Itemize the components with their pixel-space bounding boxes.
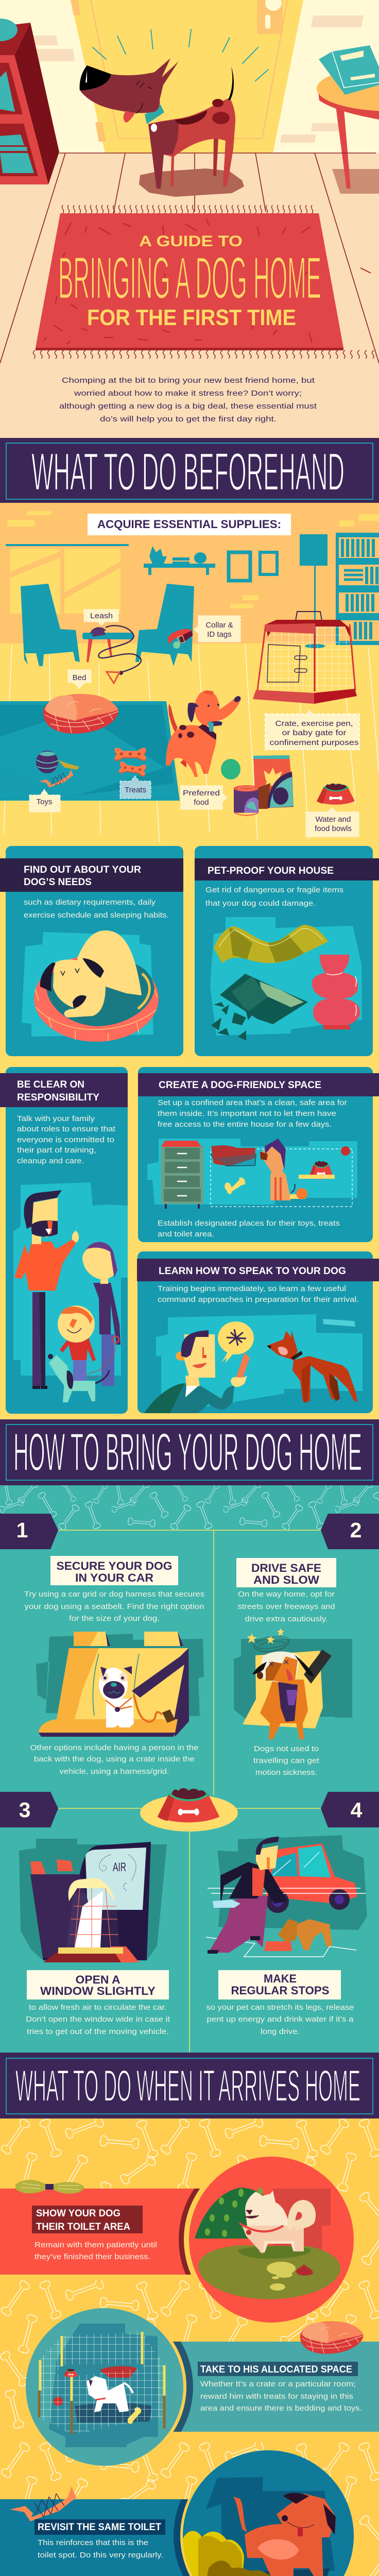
- dog shadow: [139, 168, 244, 197]
- heading: FIND OUT ABOUT YOUR: [24, 865, 141, 875]
- collar label: [194, 616, 240, 642]
- toys label: [29, 789, 60, 812]
- living room scenery: [6, 533, 379, 648]
- bookcase: [0, 19, 59, 184]
- intro text: worried about how to make it stress free? Don’t worry;: [74, 389, 302, 398]
- intro text: Chomping at the bit to bring your new best friend home, but: [62, 376, 315, 385]
- body text: such as dietary requirements, daily: [24, 898, 156, 907]
- badge 1: 1: [16, 1518, 28, 1542]
- panel: pet-proof your house: [195, 846, 379, 1056]
- illustration: open car window: [19, 1839, 167, 1962]
- title: A GUIDE TO: [139, 233, 243, 250]
- illustration: sleeping dog in bed: [22, 930, 159, 1042]
- title: FOR THE FIRST TIME: [87, 305, 296, 330]
- illustration: scarf, newspaper and vase: [210, 917, 362, 1041]
- step 2 text: [238, 1590, 335, 1623]
- body text: [158, 1098, 347, 1129]
- panel: show your dog their toilet area: [0, 2157, 354, 2323]
- preferred food label: [181, 786, 227, 809]
- step 3 text: [26, 2003, 170, 2036]
- badge 3: 3: [19, 1798, 30, 1822]
- illustration: dizzy dog: [234, 1628, 352, 1739]
- icon: green ball: [221, 759, 240, 779]
- heading: [17, 1079, 99, 1103]
- dog: [252, 1652, 314, 1739]
- badge 2: [321, 1514, 379, 1549]
- step 4 text: so your pet can stretch its legs, release: [206, 2003, 354, 2012]
- step 1 text lower: Other options include having a person in the: [30, 1743, 199, 1752]
- step 1 text: for the size of your dog.: [69, 1614, 160, 1623]
- drawers: [161, 1141, 203, 1209]
- heading: secure your dog: SECURE YOUR DOG: [57, 1560, 172, 1572]
- orange dog: [166, 690, 242, 777]
- step 2 text lower: Dogs not used to: [254, 1744, 319, 1753]
- speech bubble: [218, 1321, 254, 1363]
- step 3 text: tries to get out of the moving vehicle.: [27, 2027, 169, 2036]
- heading: open a window slightly: [27, 1970, 169, 1999]
- step 1 text lower: back with the dog, using a crate inside the: [34, 1755, 195, 1764]
- body text: everyone is committed to: [17, 1136, 114, 1144]
- intro text: do’s will help you to get the first day right.: [100, 415, 277, 423]
- icon: dog bed: [300, 2321, 364, 2354]
- heading: drive safe and slow: AND SLOW: [253, 1573, 319, 1586]
- illustration: pug in car seat: [36, 1632, 204, 1737]
- hero dog: [80, 58, 235, 189]
- body text: exercise schedule and sleeping habits.: [24, 911, 169, 920]
- heading: secure your dog: [50, 1556, 178, 1585]
- step 2 text: streets over freeways and: [238, 1602, 335, 1611]
- body text lower: Establish designated places for their toys, treats: [158, 1219, 340, 1228]
- crate label: confinement purposes: [270, 738, 358, 747]
- treats label: Treats: [125, 786, 146, 794]
- step 1 text lower: vehicle, using a harness/grid.: [60, 1767, 169, 1776]
- panel: find out about your dog's needs: [0, 846, 183, 1056]
- body text lower: [158, 1219, 340, 1239]
- door: [71, 0, 303, 153]
- step 2 text lower: travelling can get: [253, 1756, 320, 1765]
- heading: DOG’S NEEDS: [24, 877, 92, 888]
- dog: [260, 1139, 295, 1200]
- icon: central food bowl: [140, 1788, 238, 1832]
- body text: that your dog could damage.: [205, 899, 316, 908]
- man: [144, 1330, 234, 1413]
- panel: learn how to speak to your dog: [137, 1251, 379, 1413]
- white dog: [87, 2376, 133, 2412]
- body text: command approaches in preparation for their arrival.: [158, 1295, 359, 1304]
- icon: food bag and can: [234, 755, 294, 816]
- icon: toy: [10, 2486, 77, 2521]
- floor lines: [4, 644, 379, 842]
- body text: Get rid of dangerous or fragile items: [205, 886, 343, 894]
- heading: drive safe and slow: [236, 1558, 336, 1587]
- heading: secure your dog: IN YOUR CAR: [75, 1571, 153, 1584]
- badge 3: [0, 1792, 58, 1827]
- panel: acquire essential supplies: [0, 503, 379, 1419]
- icon: leash: [91, 625, 141, 683]
- heading: REVISIT THE SAME TOILET: [38, 2522, 161, 2533]
- leash label: Leash: [90, 612, 113, 620]
- illustration: man with treat and dog: [144, 1314, 363, 1413]
- panel: be clear on responsibility: [0, 1067, 128, 1414]
- body text: Remain with them patiently until: [35, 2241, 157, 2249]
- preferred food label: Preferred: [183, 789, 220, 798]
- heading: acquire essential supplies: ACQUIRE ESSENTIAL SUPPLIES:: [97, 518, 281, 531]
- intro text: [59, 376, 317, 423]
- heading: THEIR TOILET AREA: [36, 2222, 130, 2232]
- treats label: [120, 776, 151, 799]
- heading: acquire essential supplies: [88, 514, 291, 535]
- treat and hand: [231, 1352, 250, 1387]
- body text: cleanup and care.: [17, 1157, 84, 1165]
- toys label: Toys: [37, 798, 52, 806]
- step 1 text: your dog using a seatbelt. Find the right option: [25, 1602, 204, 1611]
- badge 1: [0, 1514, 58, 1549]
- heading: open a window slightly: WINDOW SLIGHTLY: [40, 1985, 156, 1997]
- body text: This reinforces that this is the: [38, 2538, 148, 2547]
- body text: Set up a confined area that’s a clean, safe area for: [158, 1098, 347, 1107]
- bed label: Bed: [73, 673, 86, 682]
- heading: [32, 2206, 143, 2233]
- illustration: orange dog and bushes: [182, 2477, 336, 2576]
- man: [14, 1190, 79, 1389]
- panel: create a dog-friendly space: [138, 1067, 379, 1242]
- water and food bowls label: food bowls: [315, 824, 352, 833]
- heading: LEARN HOW TO SPEAK TO YOUR DOG: [159, 1266, 346, 1277]
- motion lines: [93, 29, 268, 81]
- armchairs: [21, 584, 194, 666]
- crate label: or baby gate for: [282, 728, 346, 737]
- car: [266, 1843, 357, 1913]
- collar label: Collar &: [205, 621, 233, 630]
- illustration: dog on grass: [195, 2188, 340, 2299]
- body text: [158, 1284, 359, 1304]
- crate: [253, 612, 357, 704]
- body text: their part of training,: [17, 1146, 96, 1155]
- body text: [35, 2241, 157, 2261]
- rug: [33, 205, 374, 359]
- panel: arrival background: [0, 2119, 379, 2576]
- body text: reward him with treats for staying in this: [200, 2392, 353, 2401]
- body text: [205, 886, 343, 908]
- panel: revisit the same toilet: [0, 2444, 363, 2576]
- body text: [38, 2538, 163, 2560]
- body text: them inside. It’s important not to let them have: [158, 1109, 336, 1118]
- step 2 text: On the way home, opt for: [238, 1590, 335, 1599]
- panel: travel steps: [0, 1485, 379, 2053]
- step 2 text lower: motion sickness.: [255, 1768, 317, 1777]
- title: [58, 233, 321, 330]
- badge 4: 4: [351, 1798, 363, 1822]
- heading: CREATE A DOG-FRIENDLY SPACE: [159, 1080, 321, 1091]
- body text: [17, 1114, 116, 1165]
- teal rug: [0, 701, 180, 801]
- dog with bowl: [264, 1919, 332, 1951]
- body text lower: and toilet area.: [158, 1230, 214, 1239]
- red dog: [267, 1330, 357, 1402]
- boy: [58, 1306, 96, 1383]
- woman: [82, 1242, 120, 1386]
- heading: make regular stops: REGULAR STOPS: [231, 1984, 330, 1997]
- heading: TAKE TO HIS ALLOCATED SPACE: [200, 2364, 352, 2375]
- body text: Training begins immediately, so learn a few useful: [158, 1284, 346, 1293]
- heading: [35, 2519, 165, 2535]
- illustration: regular stop: [206, 1835, 367, 1957]
- body text: Talk with your family: [17, 1114, 95, 1123]
- crate label: Crate, exercise pen,: [275, 719, 353, 728]
- body text: toilet spot. Do this very regularly.: [38, 2551, 163, 2560]
- body text: area and ensure there is bedding and toys.: [200, 2404, 362, 2413]
- illustration: dog-friendly space: [147, 1139, 357, 1209]
- step 1 text: Try using a car grid or dog harness that secures: [24, 1590, 204, 1599]
- icon: bed: [43, 694, 118, 734]
- body text: free access to the entire house for a few days.: [158, 1120, 332, 1129]
- panel: hero room scene: [0, 0, 379, 438]
- step 1 text: [24, 1590, 204, 1623]
- icon: treats: [115, 748, 146, 777]
- icon: rope toy: [15, 2180, 84, 2194]
- heading: drive safe and slow: DRIVE SAFE: [251, 1562, 321, 1574]
- badge 4: [321, 1792, 379, 1827]
- bed label: [68, 670, 91, 688]
- water and food bowls label: Water and: [316, 815, 351, 824]
- heading: [24, 865, 141, 888]
- body text: [200, 2380, 362, 2413]
- heading: PET-PROOF YOUR HOUSE: [208, 866, 334, 876]
- step 4 text: [206, 2003, 354, 2036]
- step 3 text: Don’t open the window wide in case it: [26, 2015, 170, 2024]
- intro text: although getting a new dog is a big deal, these essential must: [59, 402, 317, 411]
- teal dog: [48, 1354, 109, 1402]
- body text: about roles to ensure that: [17, 1125, 116, 1133]
- collar label: ID tags: [207, 630, 232, 639]
- illustration: family with dog: [13, 1182, 128, 1402]
- body text: Whether It’s a crate or a particular room;: [200, 2380, 356, 2388]
- panel: take to his allocated space: [26, 2308, 379, 2466]
- step 4 text: long drive.: [261, 2027, 300, 2036]
- road lines: [206, 1888, 366, 1957]
- icon: collar and ID tag: [168, 629, 193, 649]
- icon: bowl: [317, 784, 355, 805]
- pug: [99, 1666, 175, 1727]
- heading: make regular stops: MAKE: [264, 1972, 297, 1985]
- small table: [82, 633, 134, 662]
- man: [208, 1837, 287, 1954]
- leash label: [84, 609, 118, 625]
- floor planks: [0, 153, 379, 363]
- icon: toys: [36, 751, 79, 788]
- badge 2: 2: [350, 1518, 361, 1542]
- step 2 text lower: [253, 1744, 320, 1777]
- side table with books: [317, 45, 379, 194]
- illustration: dog in pen: [39, 2324, 164, 2447]
- heading: make regular stops: [218, 1970, 341, 1999]
- bowl: [299, 1161, 335, 1179]
- crate label: [265, 709, 359, 750]
- heading: open a window slightly: OPEN A: [75, 1973, 120, 1986]
- body text: [24, 898, 169, 920]
- heading: BE CLEAR ON: [17, 1079, 84, 1090]
- step 3 text: to allow fresh air to circulate the car.: [29, 2003, 167, 2012]
- step 2 text: drive extra cautiously.: [245, 1615, 328, 1623]
- illustration: open car window: AIR: [113, 1860, 126, 1874]
- step 1 text lower: [30, 1743, 199, 1776]
- heading: RESPONSIBILITY: [17, 1092, 99, 1103]
- water and food bowls label: [306, 808, 359, 837]
- body text: they’ve finished their business.: [35, 2252, 150, 2261]
- preferred food label: food: [194, 798, 209, 807]
- bed: [211, 1145, 256, 1166]
- step 4 text: pent up energy and drink water if it’s a: [207, 2015, 354, 2024]
- heading: SHOW YOUR DOG: [36, 2208, 120, 2219]
